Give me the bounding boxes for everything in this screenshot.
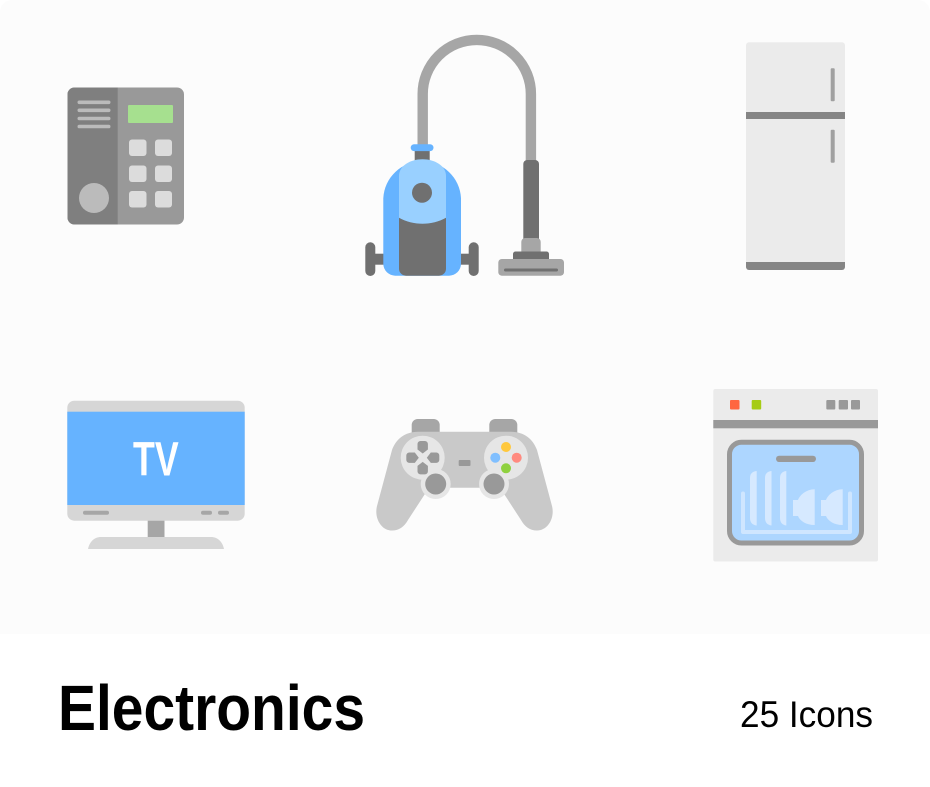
icon: refrigerator: [746, 42, 845, 270]
icon count: 25 Icons: [740, 694, 873, 735]
icon: vacuum cleaner: [365, 40, 564, 276]
icon: dishwasher: [713, 389, 878, 562]
icon: television: [67, 401, 245, 549]
title: Electronics: [58, 672, 365, 744]
icon: game controller: [376, 419, 553, 530]
icon: desk phone: [68, 88, 184, 224]
TV screen label: TV: [133, 434, 179, 487]
